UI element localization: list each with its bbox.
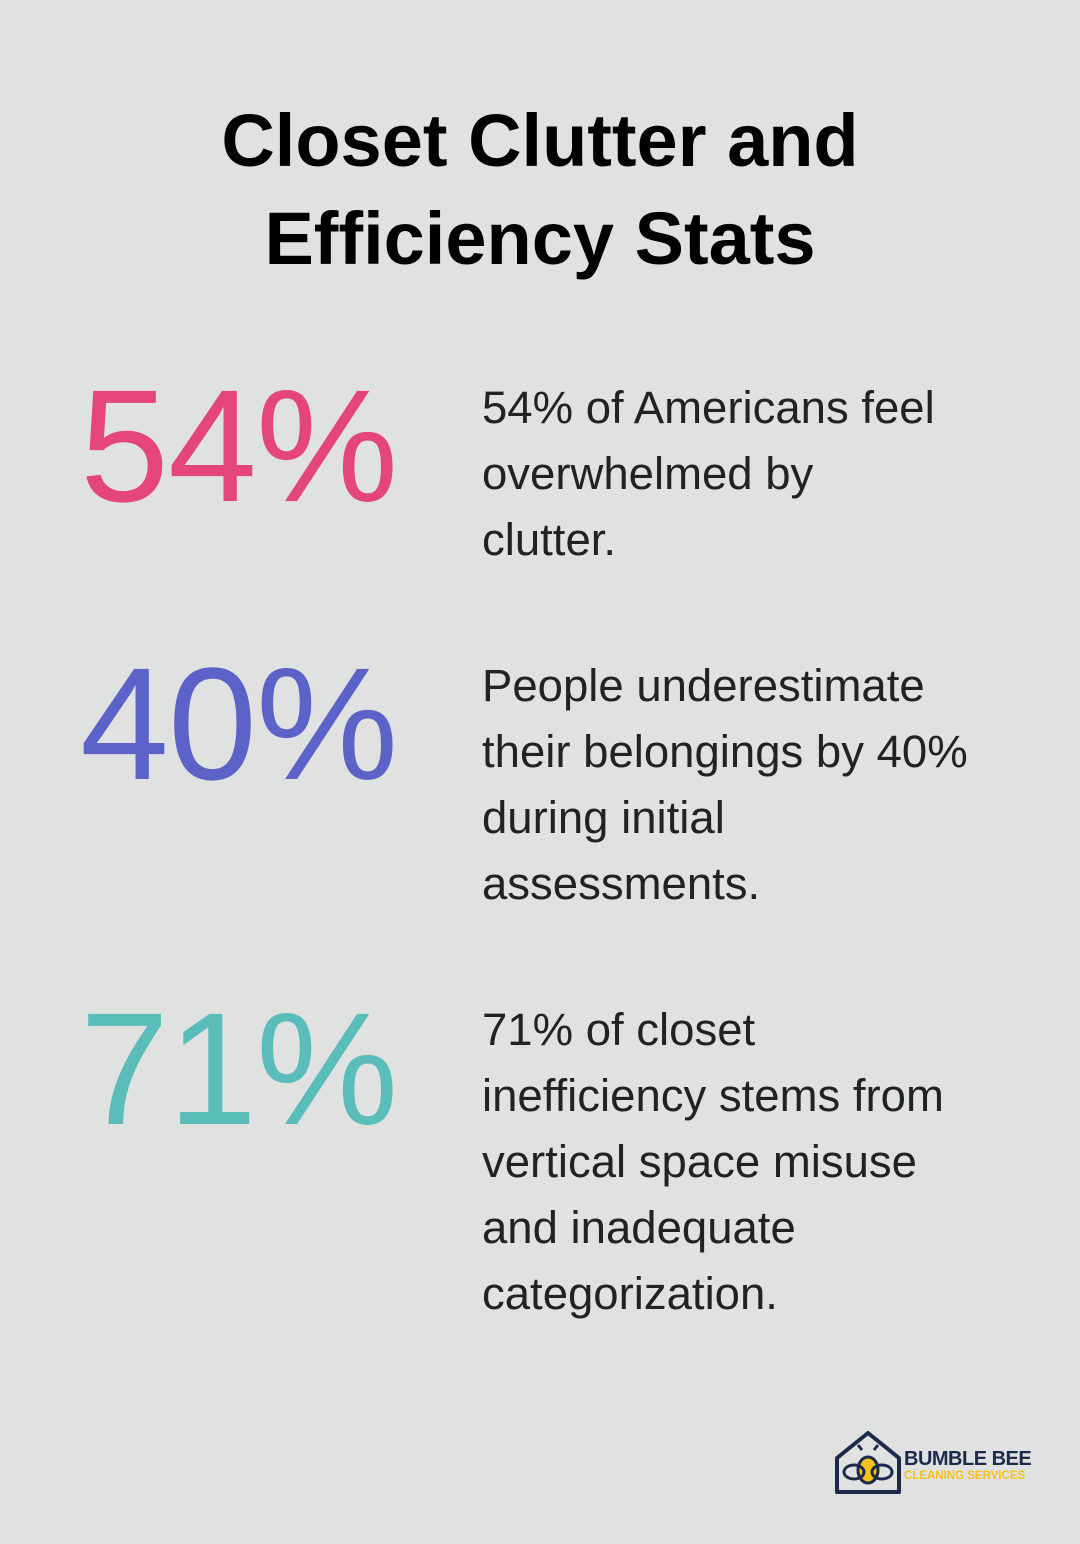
stat 2 text: during initial	[482, 792, 725, 843]
title	[221, 99, 859, 280]
stat 1 text: overwhelmed by	[482, 448, 813, 499]
stat 2 text: their belongings by 40%	[482, 726, 968, 777]
logo text: BUMBLE BEE	[904, 1448, 1031, 1470]
stat 1 text: clutter.	[482, 514, 616, 565]
logo text: CLEANING SERVICES	[904, 1470, 1025, 1482]
stat 3 text: and inadequate	[482, 1202, 796, 1253]
stat 3 text	[482, 1004, 944, 1319]
stat 2 text: assessments.	[482, 858, 760, 909]
stat 2 number: 40%	[80, 634, 397, 813]
stat 1 text: 54% of Americans feel	[482, 382, 935, 433]
stat 3 text: categorization.	[482, 1268, 778, 1319]
title: Closet Clutter and	[221, 99, 859, 182]
stat 3 number: 71%	[80, 979, 397, 1158]
icon: bee house	[835, 1430, 901, 1494]
title: Efficiency Stats	[264, 197, 816, 280]
stat 3 text: 71% of closet	[482, 1004, 755, 1055]
logo text	[904, 1448, 1031, 1482]
stat 1 text	[482, 382, 935, 565]
stat 3 text: vertical space misuse	[482, 1136, 917, 1187]
stat 2 text: People underestimate	[482, 660, 925, 711]
logo	[835, 1430, 1031, 1494]
stat 1 number: 54%	[80, 356, 397, 535]
stat 2 text	[482, 660, 968, 909]
stat 3 text: inefficiency stems from	[482, 1070, 944, 1121]
